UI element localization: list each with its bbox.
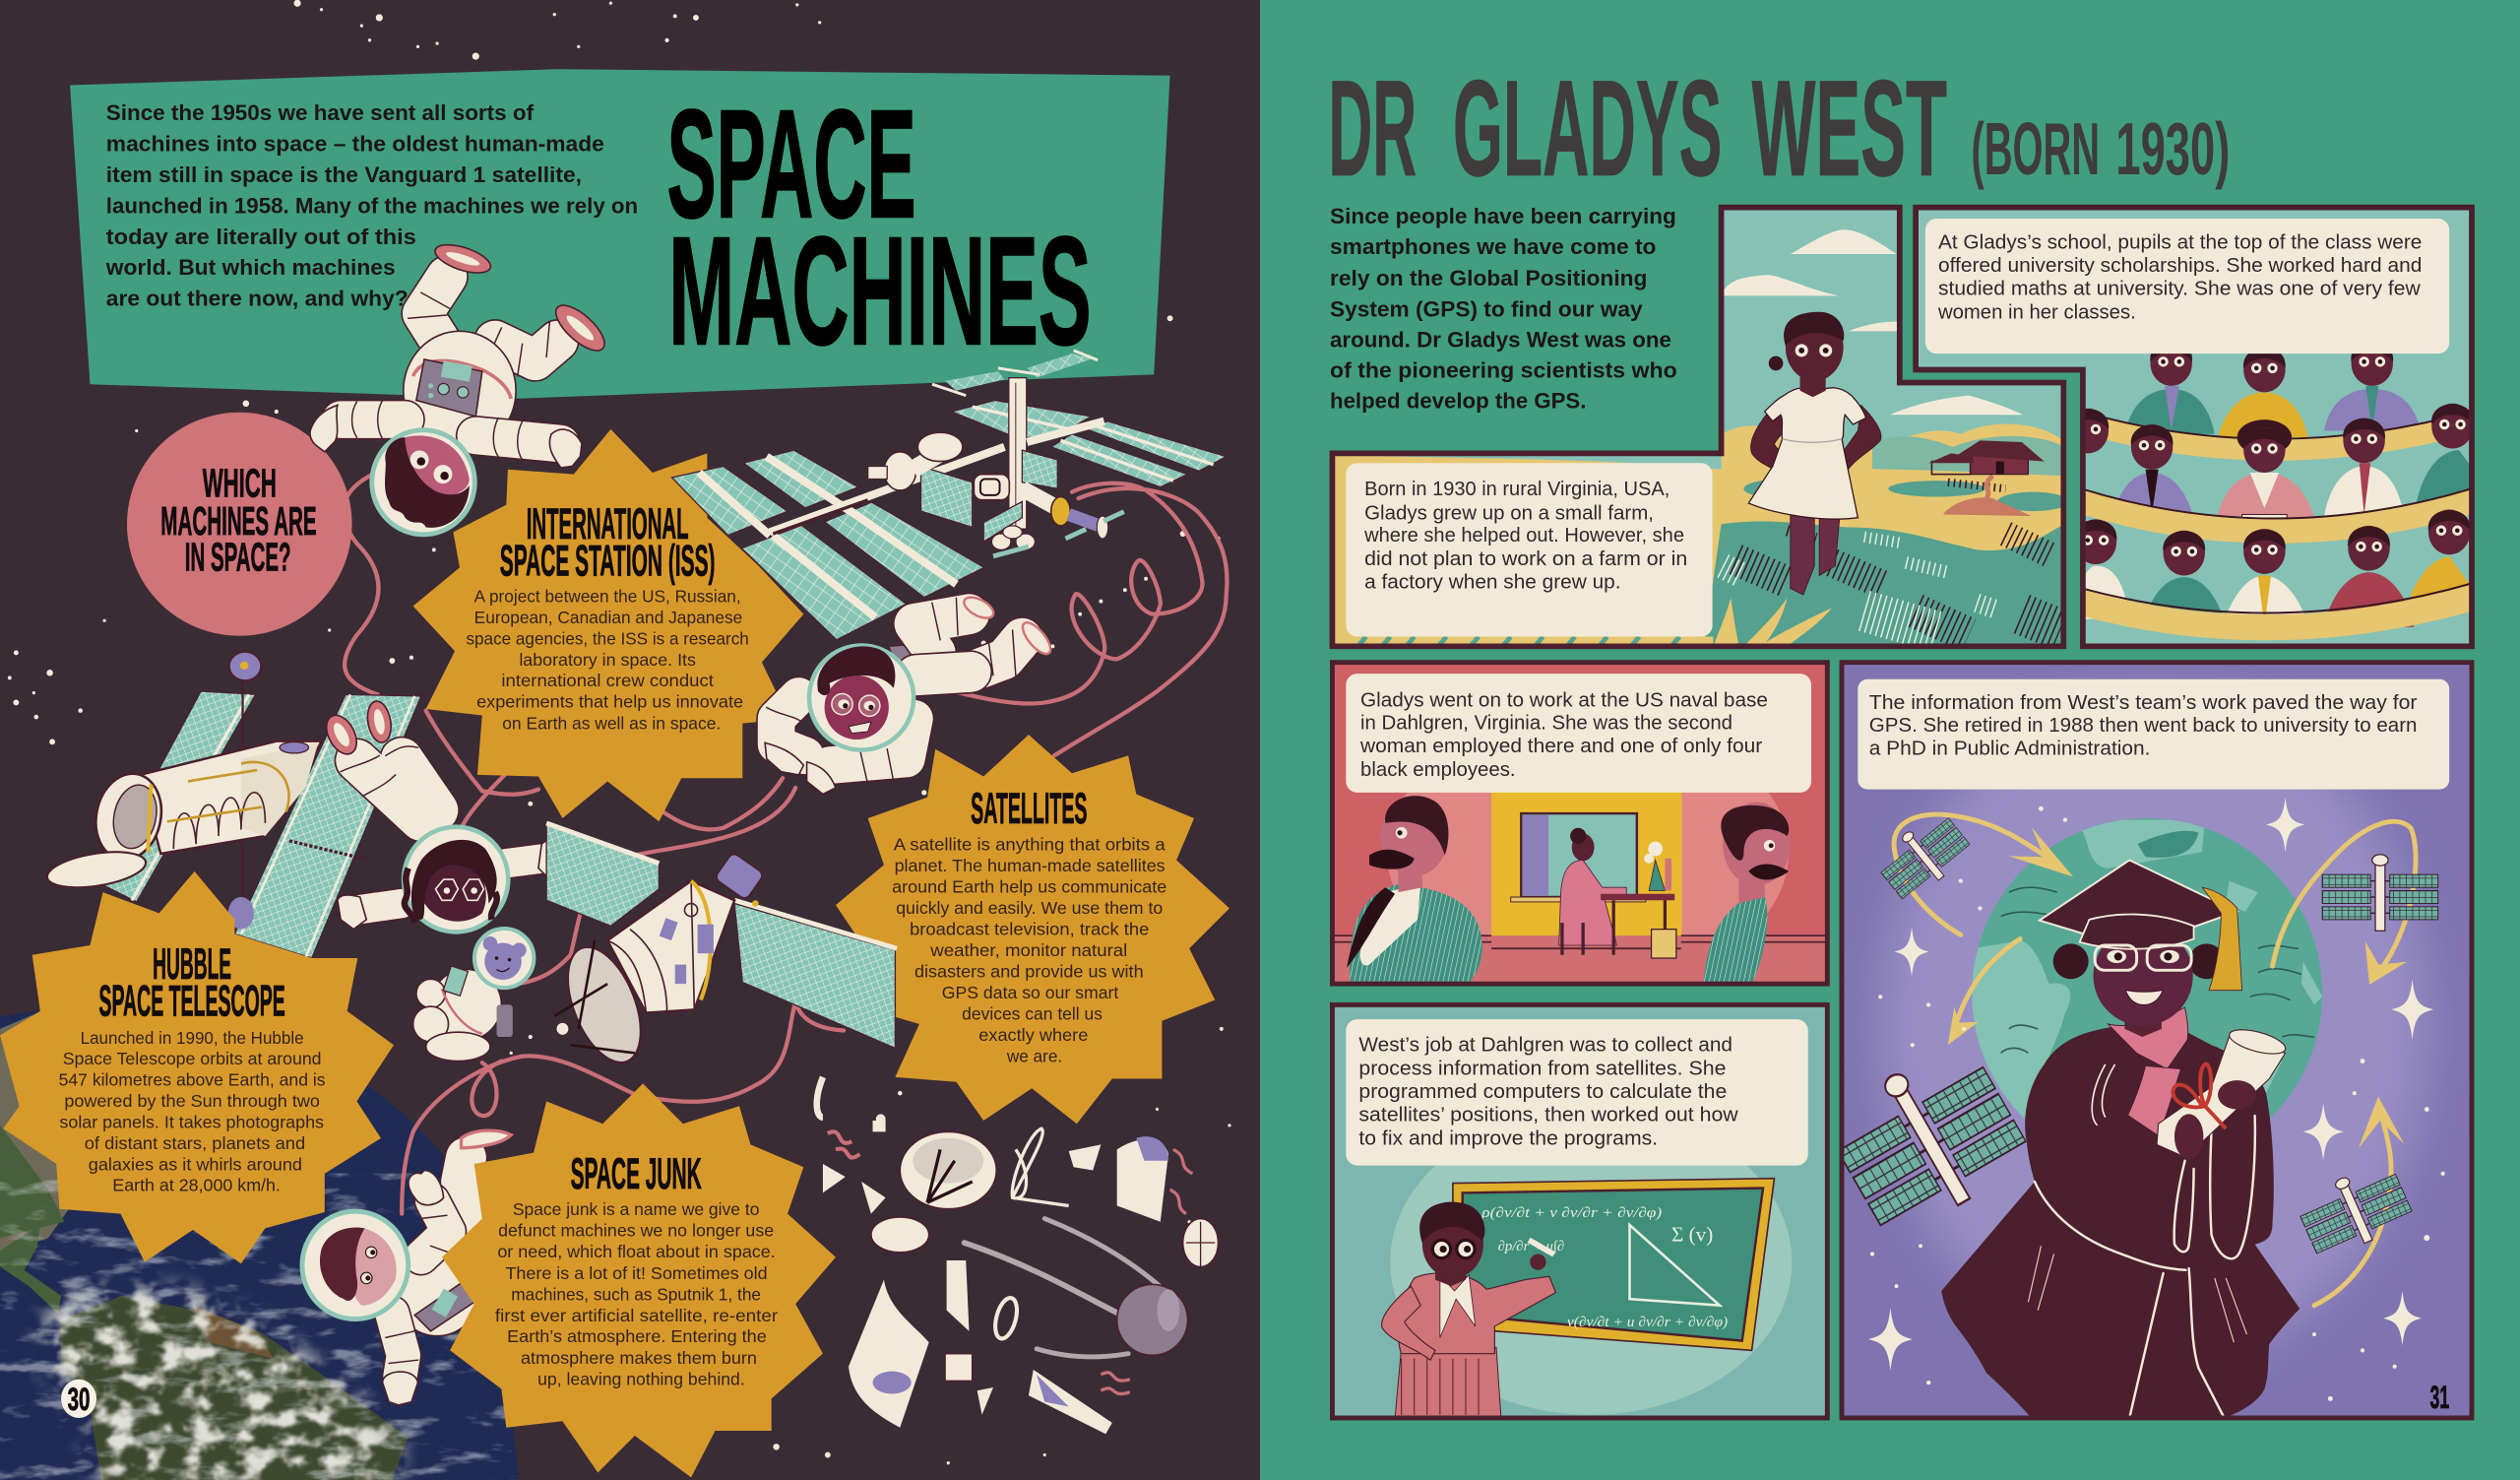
speech box: Dahlgren job text: process information from satellites. She — [1358, 1059, 1726, 1080]
woman at desk — [1559, 828, 1676, 958]
badge: Satellites: GPS data so our smart — [942, 983, 1118, 1002]
illustration: communications satellite — [546, 823, 897, 1073]
left page background — [0, 0, 1260, 1480]
badge: Hubble Space Telescope: HUBBLE — [153, 940, 231, 989]
badge: Satellites: we are. — [1006, 1047, 1062, 1066]
badge: Satellites — [836, 735, 1229, 1124]
illustration: astronaut with curly hair and glasses — [765, 593, 1055, 795]
badge: Satellites: broadcast television, track the — [910, 920, 1149, 939]
title: Space Machines: MACHINES — [668, 205, 1092, 377]
badge: which machines are in space — [127, 413, 352, 636]
speech box: naval base text: black employees. — [1360, 759, 1516, 781]
illustration: space junk debris — [817, 1077, 1219, 1434]
badge: Space Junk: first ever artificial satellite, re-enter — [495, 1306, 778, 1325]
comic panel: graduate — [1819, 663, 2472, 1418]
badge: Satellites: devices can tell us — [962, 1004, 1102, 1024]
badge: Space Junk: Space junk is a name we give to — [513, 1199, 759, 1219]
illustration: astronaut over the banner — [310, 239, 611, 535]
intro text: GPS: smartphones we have come to — [1330, 234, 1656, 259]
intro text — [105, 100, 638, 311]
speech box: farm text: a factory when she grew up. — [1364, 572, 1621, 594]
speech box: Dahlgren job text: programmed computers to calculate the — [1358, 1081, 1727, 1103]
intro text: world. But which machines — [105, 255, 396, 280]
page number 30 — [61, 1380, 96, 1418]
illustration: astronaut at bottom left — [302, 1130, 511, 1405]
badge: which machines are in space: IN SPACE? — [185, 535, 291, 580]
speech box: farm text: Born in 1930 in rural Virginia, USA, — [1364, 479, 1670, 500]
badge: Hubble Space Telescope: powered by the Sun through two — [64, 1091, 320, 1111]
middle row students — [2085, 404, 2469, 518]
speech box: Dahlgren job text: to fix and improve the programs. — [1358, 1127, 1658, 1149]
page number 30: 30 — [68, 1381, 90, 1417]
badge: Satellites: A satellite is anything that orbits a — [894, 834, 1166, 854]
starfield — [8, 0, 1231, 1464]
orbiting satellites — [1819, 806, 2438, 1262]
intro text: Since the 1950s we have sent all sorts of — [106, 100, 535, 125]
intro text: GPS: of the pioneering scientists who — [1330, 358, 1677, 383]
speech box: farm text: where she helped out. However, she — [1363, 525, 1684, 547]
intro text: GPS: Since people have been carrying — [1330, 204, 1676, 228]
badge: Hubble Space Telescope: SPACE TELESCOPE — [98, 977, 285, 1025]
badge: Hubble Space Telescope: Launched in 1990, the Hubble — [81, 1028, 304, 1048]
badge: International Space Station: European, Canadian and Japanese — [474, 608, 742, 627]
badge: Hubble Space Telescope: galaxies as it whirls around — [89, 1155, 302, 1175]
title: Dr Gladys West: GLADYS — [1453, 52, 1722, 205]
badge: Space Junk: up, leaving nothing behind. — [537, 1369, 745, 1388]
speech box: Dahlgren job text: satellites’ positions, then worked out how — [1358, 1104, 1738, 1126]
badge: International Space Station: space agencies, the ISS is a research — [466, 628, 749, 648]
speech box: farm text — [1346, 463, 1713, 637]
badge: Hubble Space Telescope: solar panels. It takes photographs — [59, 1113, 324, 1132]
intro text: are out there now, and why? — [106, 287, 409, 311]
badge: Space Junk: SPACE JUNK — [571, 1150, 702, 1198]
comic panel: classroom — [1916, 208, 2483, 648]
man right — [1704, 803, 1791, 984]
badge: which machines are in space: WHICH — [203, 460, 277, 505]
page number 31: 31 — [2430, 1379, 2449, 1415]
badge: which machines are in space: MACHINES ARE — [160, 498, 317, 544]
illustration: Earth from space — [0, 1004, 531, 1480]
man left — [1347, 796, 1482, 984]
sparkle stars — [1868, 798, 2433, 1371]
badge: Space Junk: Earth’s atmosphere. Entering the — [507, 1326, 767, 1346]
speech box: PhD text: The information from West’s team’s work paved the way for — [1869, 692, 2418, 714]
intro text: item still in space is the Vanguard 1 satellite, — [106, 162, 582, 187]
graduate figure — [1941, 860, 2300, 1418]
badge: International Space Station: SPACE STATION (ISS) — [500, 537, 716, 585]
badge: Satellites: around Earth help us communicate — [892, 876, 1166, 896]
clouds — [1722, 229, 2023, 415]
intro text: today are literally out of this — [106, 225, 416, 249]
chalkboard: ν(∂v/∂t + u ∂v/∂r + ∂v/∂φ) — [1567, 1315, 1728, 1330]
speech box: PhD text — [1858, 679, 2449, 790]
badge: Satellites: exactly where — [978, 1025, 1088, 1045]
intro text: GPS: helped develop the GPS. — [1330, 389, 1586, 414]
illustration: International Space Station — [671, 351, 1227, 640]
title: Dr Gladys West: DR — [1328, 52, 1417, 205]
speech box: Dahlgren job text: West’s job at Dahlgren was to collect and — [1358, 1035, 1732, 1057]
grass strokes — [1723, 483, 2060, 635]
title: Space Machines: SPACE — [667, 78, 916, 250]
speech box: PhD text: a PhD in Public Administration. — [1869, 739, 2150, 760]
badge: Hubble Space Telescope: Space Telescope orbits at around — [63, 1049, 322, 1068]
speech box: naval base text: Gladys went on to work at the US naval base — [1360, 690, 1768, 712]
speech box: naval base text: woman employed there and one of only four — [1359, 736, 1762, 757]
comic panel: farm — [1332, 208, 2068, 648]
tether lines — [344, 475, 1227, 1214]
badge: Space Junk — [442, 1083, 836, 1477]
badge: Space Junk: machines, such as Sputnik 1, the — [511, 1284, 761, 1304]
badge: Satellites: SATELLITES — [971, 785, 1087, 833]
intro text: GPS: System (GPS) to find our way — [1330, 297, 1643, 322]
title: Dr Gladys West: (BORN — [1971, 107, 2100, 190]
intro text: GPS — [1330, 204, 1677, 414]
intro text: GPS: rely on the Global Positioning — [1330, 266, 1647, 290]
girl — [1748, 312, 1881, 595]
badge: Satellites: quickly and easily. We use them to — [896, 898, 1163, 918]
chalkboard: Σ (v) — [1671, 1222, 1713, 1246]
speech box: naval base text — [1346, 674, 1811, 793]
face and cap — [2053, 943, 2089, 979]
intro text: machines into space – the oldest human-made — [106, 131, 604, 156]
badge: Satellites: weather, monitor natural — [929, 940, 1127, 960]
title: Dr Gladys West: WEST — [1752, 52, 1947, 205]
right page background — [1260, 0, 2520, 1480]
badge: International Space Station: on Earth as well as in space. — [502, 713, 721, 733]
badge: Space Junk: or need, which float about in space. — [497, 1242, 776, 1261]
speech box: school text — [1925, 219, 2449, 354]
title: Dr Gladys West: 1930) — [2115, 107, 2230, 190]
illustration: Hubble Space Telescope — [44, 652, 421, 958]
badge: Space Junk: defunct machines we no longer use — [498, 1221, 774, 1241]
speech box: school text: studied maths at university. She was one of very few — [1938, 278, 2421, 299]
back row students — [2128, 354, 2419, 437]
badge: International Space Station: experiments that help us innovate — [476, 691, 743, 711]
illustration: astronaut near Hubble — [320, 699, 566, 932]
yellow bench band — [2076, 421, 2477, 450]
title: Dr Gladys West — [1328, 52, 2230, 205]
badge: Hubble Space Telescope: 547 kilometres above Earth, and is — [59, 1070, 326, 1090]
badge: Hubble Space Telescope — [0, 871, 394, 1263]
speech box: naval base text: in Dahlgren, Virginia. She was the second — [1360, 713, 1732, 735]
comic panel: naval base — [1332, 663, 1827, 989]
badge: International Space Station: INTERNATIONAL — [527, 500, 689, 548]
intro text: launched in 1958. Many of the machines we rely on — [106, 193, 638, 218]
badge: International Space Station: international crew conduct — [501, 671, 714, 690]
illustration: teddy bear astronaut — [413, 929, 534, 1062]
front row students — [2070, 510, 2483, 630]
badge: International Space Station: A project between the US, Russian, — [474, 586, 741, 606]
chalkboard — [1453, 1179, 1774, 1350]
badge: International Space Station — [413, 429, 803, 821]
teal intro banner — [70, 69, 1170, 399]
comic panel: chalkboard — [1332, 1004, 1827, 1418]
mound and sprout — [1943, 497, 2032, 516]
badge: Satellites: planet. The human-made satellites — [895, 856, 1166, 875]
gold orbit arrows — [1894, 814, 2416, 1306]
speech box: school text: At Gladys’s school, pupils at the top of the class were — [1938, 232, 2422, 254]
earth — [1972, 818, 2322, 1119]
badge: Satellites: disasters and provide us with — [914, 962, 1144, 982]
speech box: school text: offered university scholarships. She worked hard and — [1938, 255, 2422, 277]
chalkboard: ρ(∂v/∂t + v ∂v/∂r + ∂v/∂φ) — [1480, 1205, 1662, 1221]
chalkboard: ∂p/∂r + μ∫∂ — [1498, 1239, 1564, 1255]
teacher — [1382, 1202, 1555, 1418]
speech box: school text: women in her classes. — [1937, 301, 2136, 323]
yellow grass blades — [1713, 598, 1832, 646]
window — [1511, 813, 1646, 902]
speech box: PhD text: GPS. She retired in 1988 then went back to university to earn — [1869, 715, 2417, 737]
speech box: farm text: did not plan to work on a farm or in — [1364, 548, 1687, 570]
intro text: GPS: around. Dr Gladys West was one — [1330, 328, 1671, 353]
badge: Hubble Space Telescope: of distant stars, planets and — [85, 1133, 305, 1153]
badge: International Space Station: laboratory in space. Its — [519, 650, 696, 670]
badge: Space Junk: atmosphere makes them burn — [521, 1348, 757, 1368]
speech box: Dahlgren job text — [1346, 1019, 1808, 1166]
speech box: farm text: Gladys grew up on a small farm, — [1364, 502, 1654, 524]
farmhouse — [1928, 440, 2045, 475]
badge: Space Junk: There is a lot of it! Sometimes old — [505, 1263, 768, 1283]
title: Space Machines — [667, 78, 1092, 377]
badge: Hubble Space Telescope: Earth at 28,000 km/h. — [112, 1175, 281, 1194]
